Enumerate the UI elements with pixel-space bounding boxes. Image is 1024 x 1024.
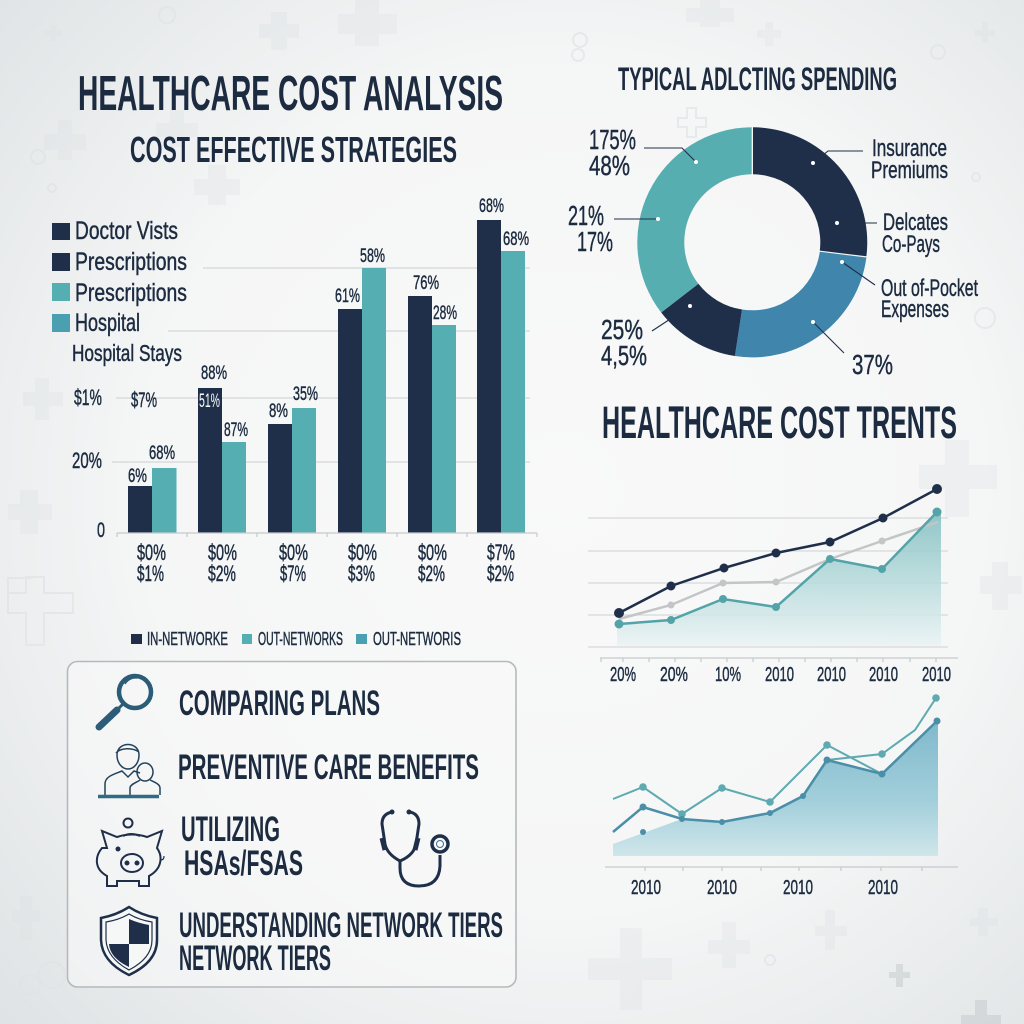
bar value labels: 28%: [433, 303, 457, 324]
donut percent labels: 17%: [577, 226, 613, 257]
upper chart axis labels: 20%: [610, 664, 636, 686]
x axis labels: $0%: [418, 540, 447, 565]
bar value labels: 61%: [335, 286, 360, 307]
x axis labels: $0%: [208, 540, 237, 565]
strategy labels: UNDERSTANDING NETWORK TIERS: [179, 906, 503, 945]
x axis labels: $2%: [418, 561, 445, 586]
strategy labels: HSAs/FSAS: [184, 844, 303, 883]
x axis labels: $2%: [487, 561, 514, 586]
donut percent labels: [568, 124, 893, 380]
donut chart: [568, 124, 978, 380]
chart legend: [52, 217, 187, 366]
network legend: IN-NETWORKE: [147, 629, 228, 649]
upper chart axis labels: 10%: [715, 664, 741, 686]
y axis labels: $1%: [74, 385, 102, 410]
donut category labels: Expenses: [881, 296, 949, 323]
y axis labels: [72, 385, 157, 542]
subtitle: COST EFFECTIVE STRATEGIES: [130, 129, 457, 170]
network legend: OUT-NETWORKS: [258, 629, 343, 649]
strategy labels: COMPARING PLANS: [179, 684, 380, 723]
bar value labels: 51%: [199, 391, 220, 412]
lower chart axis labels: 2010: [631, 877, 661, 899]
x axis labels: $7%: [487, 540, 515, 565]
donut leader lines: [614, 148, 877, 353]
lower chart axis labels: 2010: [868, 877, 898, 899]
upper chart axis labels: 2010: [922, 664, 951, 686]
bar value labels: 8%: [269, 401, 288, 422]
upper chart axis labels: 2010: [765, 664, 794, 686]
network legend: OUT-NETWORIS: [373, 629, 461, 649]
donut category labels: [871, 135, 978, 323]
bar value labels: 6%: [128, 466, 147, 487]
x axis labels: $0%: [137, 540, 166, 565]
donut percent labels: 4,5%: [601, 340, 647, 371]
lower chart axis labels: 2010: [783, 877, 813, 899]
icon: piggy bank: [97, 818, 164, 886]
donut percent labels: 25%: [601, 314, 643, 345]
network legend: [131, 629, 461, 649]
x axis labels: $0%: [279, 540, 308, 565]
chart legend: Doctor Vists: [75, 217, 178, 245]
bar value labels: 68%: [503, 229, 529, 250]
chart legend: Hospital Stays: [72, 340, 182, 366]
strategy labels: UTILIZING: [181, 810, 280, 849]
icon: stethoscope: [382, 810, 448, 886]
x axis labels: $3%: [348, 561, 375, 586]
bar value labels: 58%: [360, 246, 385, 267]
upper chart axis labels: 2010: [817, 664, 846, 686]
y axis labels: 0: [97, 519, 105, 542]
bar value labels: 88%: [201, 363, 227, 384]
bar value labels: 76%: [413, 273, 439, 294]
chart legend: Prescriptions: [75, 248, 187, 276]
donut percent labels: 37%: [852, 349, 893, 380]
chart legend: Prescriptions: [75, 279, 187, 307]
upper chart axis labels: 20%: [660, 664, 688, 686]
x axis labels: $7%: [280, 561, 306, 586]
donut percent labels: 21%: [568, 200, 604, 231]
panel: strategies: [68, 662, 516, 987]
x axis labels: [137, 540, 515, 586]
donut percent labels: 48%: [589, 150, 630, 181]
y axis labels: 20%: [72, 448, 102, 473]
donut percent labels: 175%: [589, 124, 636, 155]
x axis labels: $0%: [348, 540, 377, 565]
line chart: upper trend: [588, 484, 958, 686]
icon: shield: [101, 907, 157, 975]
bar value labels: 35%: [293, 384, 318, 405]
bars: [128, 220, 525, 533]
lower chart axis labels: 2010: [707, 877, 737, 899]
x axis labels: $1%: [137, 561, 164, 586]
donut category labels: Insurance: [872, 135, 947, 162]
bar chart: cost by category: [52, 196, 537, 586]
upper chart axis labels: 2010: [869, 664, 898, 686]
bar value labels: 87%: [224, 420, 248, 441]
title: HEALTHCARE COST ANALYSIS: [78, 66, 503, 121]
y axis labels: $7%: [131, 389, 157, 412]
strategy labels: NETWORK TIERS: [179, 939, 331, 978]
strategy labels: [178, 684, 503, 978]
bar value labels: 68%: [149, 443, 175, 464]
bar value labels: 68%: [479, 196, 504, 217]
icon: family: [98, 744, 160, 796]
lower chart axis labels: [631, 877, 898, 899]
donut category labels: Premiums: [871, 157, 948, 184]
x axis labels: $2%: [208, 561, 236, 586]
donut category labels: Out of-Pocket: [881, 275, 978, 302]
donut category labels: Delcates: [883, 209, 948, 236]
line chart: lower trend: [605, 694, 958, 899]
icon: magnifying glass: [99, 676, 151, 727]
bar value labels: [128, 196, 529, 487]
chart legend: Hospital: [75, 309, 140, 337]
upper chart axis labels: [610, 664, 951, 686]
strategy labels: PREVENTIVE CARE BENEFITS: [178, 748, 479, 787]
donut category labels: Co-Pays: [882, 231, 940, 258]
